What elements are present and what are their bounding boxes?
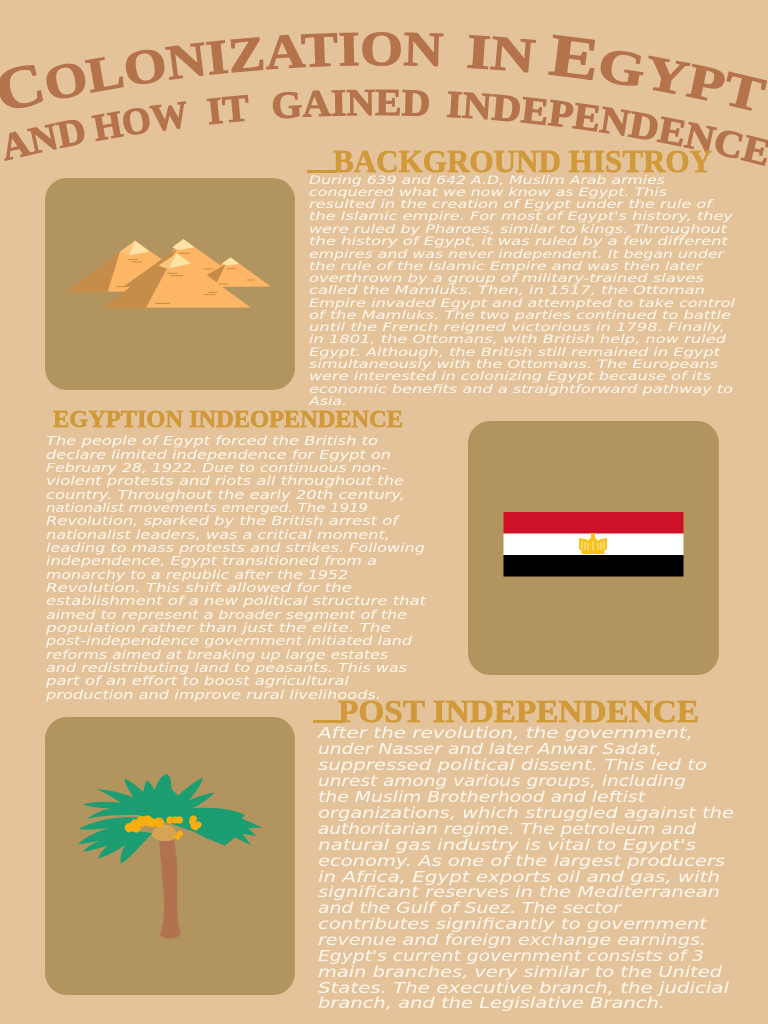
text block: egyptian independence: violent protests and riots all throughout the [46, 474, 404, 489]
text block: egyptian independence: and redistributing land to peasants. This was [46, 661, 407, 676]
title: EGYPT [548, 34, 768, 111]
text block: egyptian independence: population rather than just the elite. The [45, 621, 391, 636]
panel: pyramids image [45, 178, 295, 390]
icon: pyramids [67, 239, 271, 308]
text block: background history: economic benefits and a straightforward pathway to [309, 382, 733, 396]
text block: background history: Asia. [308, 394, 347, 408]
text block: egyptian independence [45, 434, 427, 703]
icon: palm tree [77, 774, 263, 939]
text block: post independence: revenue and foreign exchange earnings. [318, 931, 706, 949]
text block: post independence: suppressed political dissent. This led to [318, 756, 707, 774]
text block: post independence: natural gas industry is vital to Egypt's [318, 836, 696, 854]
text block: background history: Empire invaded Egypt and attempted to take control [309, 296, 736, 310]
text block: egyptian independence: February 28, 1922. Due to continuous non- [46, 461, 387, 476]
text block: background history: until the French reigned victorious in 1798. Finally, [309, 320, 725, 334]
title: COLONIZATION [0, 32, 444, 108]
text block: post independence [317, 724, 734, 1012]
text block: background history: During 639 and 642 A.D, Muslim Arab armies [309, 173, 665, 187]
heading: post independence: POST INDEPENDENCE [338, 693, 699, 729]
subtitle: GAINED [272, 90, 429, 118]
text block: egyptian independence: The people of Egypt forced the British to [46, 434, 378, 449]
heading: egyptian independence: EGYPTION INDEOPENDENCE [53, 407, 403, 433]
subtitle: INDEPENDENCE [446, 91, 768, 166]
text block: egyptian independence: part of an effort to boost agricultural [45, 674, 350, 689]
text block: post independence: unrest among various groups, including [318, 772, 686, 790]
text block: post independence: economy. As one of the largest producers [318, 852, 725, 870]
title [0, 32, 768, 111]
icon: flag of Egypt [504, 512, 684, 576]
text block: background history: of the Mamluks. The two parties continued to battle [309, 308, 731, 322]
text block: post independence: Egypt's current government consists of 3 [318, 947, 704, 965]
text block: post independence: in Africa, Egypt exports oil and gas, with [318, 868, 720, 886]
heading: background history: BACKGROUND HISTROY [333, 143, 712, 179]
text block: egyptian independence: establishment of a new political structure that [46, 594, 427, 609]
text block: post independence: organizations, which struggled against the [318, 804, 734, 822]
text block: egyptian independence: independence, Egypt transitioned from a [46, 554, 377, 569]
text block: post independence: main branches, very similar to the United [318, 963, 722, 981]
text block: post independence: After the revolution, the government, [317, 724, 693, 742]
subtitle [4, 90, 768, 166]
title: IN [467, 34, 536, 73]
text block: background history [308, 173, 736, 408]
text block: post independence: under Nasser and later Anwar Sadat, [318, 740, 662, 758]
text block: egyptian independence: Revolution, sparked by the British arrest of [46, 514, 401, 529]
text block: egyptian independence: leading to mass protests and strikes. Following [46, 541, 425, 556]
panel: flag image [468, 421, 719, 675]
text block: egyptian independence: aimed to represent a broader segment of the [46, 608, 407, 623]
text block: post independence: branch, and the Legislative Branch. [318, 994, 665, 1012]
text block: egyptian independence: country. Throughout the early 20th century, [46, 488, 405, 503]
text block: egyptian independence: reforms aimed at breaking up large estates [46, 648, 388, 663]
text block: egyptian independence: nationalist movements emerged. The 1919 [46, 501, 368, 516]
text block: egyptian independence: post-independence government initiated land [45, 634, 413, 649]
text block: post independence: authoritarian regime. The petroleum and [318, 820, 696, 838]
text block: post independence: the Muslim Brotherhood and leftist [318, 788, 646, 806]
text block: background history: in 1801, the Ottomans, with British help, now ruled [309, 332, 727, 346]
text block: egyptian independence: nationalist leaders, was a critical moment, [46, 528, 390, 543]
subtitle: IT [206, 94, 248, 125]
text block: background history: were ruled by Pharoes, similar to kings. Throughout [309, 222, 728, 236]
text block: background history: called the Mamluks. Then, in 1517, the Ottoman [309, 283, 705, 297]
text block: background history: the rule of the Islamic Empire and was then later [309, 259, 704, 273]
text block: background history: empires and was never independent. It began under [309, 247, 726, 261]
panel: palm tree image [45, 717, 295, 995]
text block: background history: resulted in the creation of Egypt under the rule of [309, 197, 715, 211]
text block: post independence: and the Gulf of Suez. The sector [318, 899, 623, 917]
text block: background history: the history of Egypt, it was ruled by a few different [309, 234, 729, 248]
text block: post independence: States. The executive branch, the judicial [318, 979, 730, 997]
text block: egyptian independence: declare limited independence for Egypt on [46, 448, 391, 463]
text block: post independence: contributes significantly to government [318, 915, 708, 933]
text block: background history: conquered what we now know as Egypt. This [309, 185, 667, 199]
text block: background history: overthrown by a group of military-trained slaves [309, 271, 704, 285]
text block: background history: simultaneously with the Ottomans. The Europeans [309, 357, 718, 371]
text block: egyptian independence: monarchy to a republic after the 1952 [46, 568, 348, 583]
text block: background history: Egypt. Although, the British still remained in Egypt [309, 345, 721, 359]
text block: background history: the Islamic empire. For most of Egypt's history, they [309, 209, 733, 223]
subtitle: HOW [91, 101, 186, 142]
text block: egyptian independence: production and improve rural livelihoods. [45, 688, 381, 703]
text block: background history: were interested in colonizing Egypt because of its [309, 369, 711, 383]
text block: post independence: significant reserves in the Mediterranean [318, 883, 720, 901]
text block: egyptian independence: Revolution. This shift allowed for the [46, 581, 352, 596]
